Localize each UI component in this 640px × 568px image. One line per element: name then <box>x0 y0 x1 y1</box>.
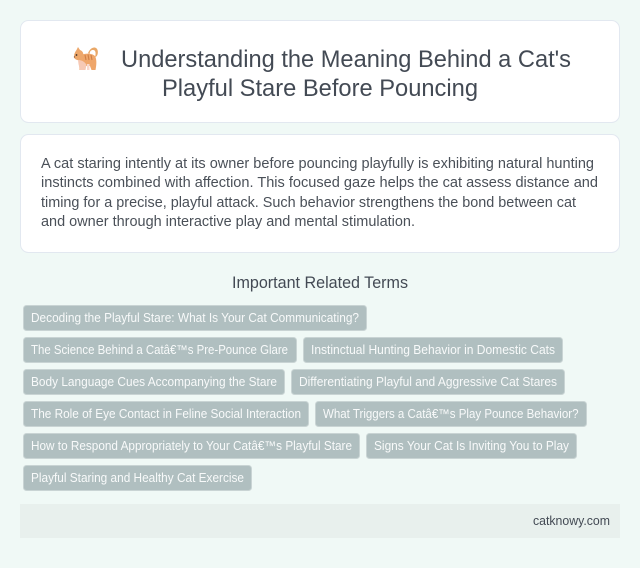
paragraph text: instincts combined with affection. This focused gaze helps the cat assess distance and <box>41 175 598 191</box>
tag <box>24 402 308 426</box>
tag <box>24 434 360 458</box>
tag <box>24 338 296 362</box>
tag <box>24 370 284 394</box>
footer site name: catknowy.com <box>533 514 610 528</box>
tag: Playful Staring and Healthy Cat Exercise <box>31 471 244 485</box>
tag <box>24 306 366 330</box>
icon: cat <box>74 47 98 70</box>
paragraph text: timing for a precise, playful attack. Such behavior strengthens the bond between cat <box>41 195 576 211</box>
panel: title <box>20 20 620 122</box>
tag <box>292 370 564 394</box>
tag group: related terms <box>24 306 586 490</box>
paragraph text <box>41 156 598 230</box>
tag: What Triggers a Catâ€™s Play Pounce Behavior? <box>323 407 579 421</box>
tag: Signs Your Cat Is Inviting You to Play <box>374 439 570 453</box>
tag: Body Language Cues Accompanying the Stare <box>31 375 277 389</box>
tag: Instinctual Hunting Behavior in Domestic Cats <box>311 343 555 357</box>
panel: description <box>20 134 620 252</box>
paragraph text: and owner through interactive play and mental stimulation. <box>41 214 415 230</box>
title line 1: Understanding the Meaning Behind a Cat's <box>121 46 571 73</box>
tag: The Role of Eye Contact in Feline Social Interaction <box>31 407 301 421</box>
tag <box>304 338 562 362</box>
tag <box>366 434 576 458</box>
heading: related terms: Important Related Terms <box>232 274 408 292</box>
tag <box>24 466 252 490</box>
paragraph text: A cat staring intently at its owner before pouncing playfully is exhibiting natural hunting <box>41 156 594 172</box>
footer <box>20 504 620 538</box>
tag: The Science Behind a Catâ€™s Pre-Pounce Glare <box>31 343 288 357</box>
tag: Differentiating Playful and Aggressive Cat Stares <box>299 375 557 389</box>
tag <box>316 402 586 426</box>
tag: Decoding the Playful Stare: What Is Your Cat Communicating? <box>31 311 359 325</box>
tag: How to Respond Appropriately to Your Catâ€™s Playful Stare <box>31 439 352 453</box>
title line 2: Playful Stare Before Pouncing <box>162 75 478 102</box>
